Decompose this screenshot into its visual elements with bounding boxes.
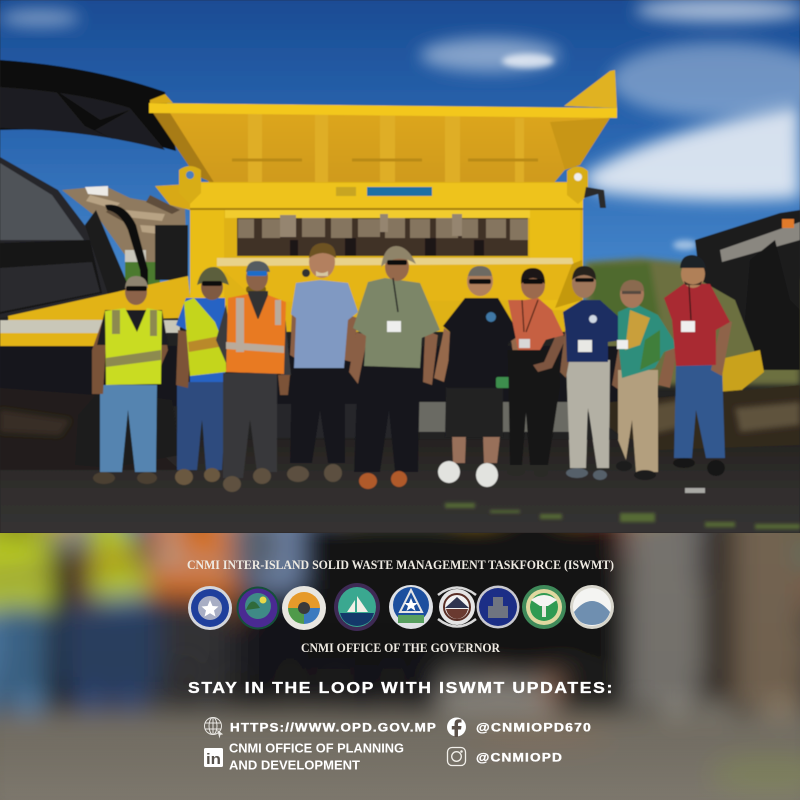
logo 4 — [334, 583, 380, 631]
person 2: green vest, blue shirt — [175, 267, 229, 485]
logo 7 — [476, 586, 520, 628]
contact links — [204, 718, 592, 772]
dark centre of blurred trousers — [300, 515, 625, 665]
blurred photo background band — [0, 533, 800, 800]
person 10: red polo, jeans — [664, 255, 732, 476]
ground — [0, 385, 800, 533]
black canopy arm — [0, 60, 176, 151]
person 7: coral top, black pants — [507, 268, 566, 477]
person 3: orange vest — [216, 261, 291, 492]
linkedin name: CNMI OFFICE OF PLANNING — [229, 742, 404, 756]
person 9: tropical shirt, khaki pants — [616, 280, 678, 480]
black machine cab — [0, 157, 148, 318]
subheading: office of the governor: CNMI OFFICE OF THE GOVERNOR — [301, 641, 501, 655]
yellow boom and base — [0, 276, 620, 406]
icon: globe — [204, 718, 222, 736]
hillside vegetation — [585, 258, 800, 385]
lower hopper panel — [217, 258, 582, 308]
pale shoes — [440, 680, 540, 712]
yellow shredder hopper lid — [149, 70, 617, 184]
debris pile — [62, 186, 187, 285]
logo 5 — [389, 585, 433, 629]
heading: taskforce name: CNMI INTER-ISLAND SOLID WASTE MANAGEMENT TASKFORCE (ISWMT) — [187, 558, 614, 572]
blurred grey trousers — [628, 515, 698, 705]
instagram handle: @CNMIOPD — [476, 750, 563, 764]
sky with clouds — [0, 0, 800, 300]
heading: stay in the loop: STAY IN THE LOOP WITH ISWMT UPDATES: — [188, 680, 614, 697]
facebook handle: @CNMIOPD670 — [476, 720, 592, 734]
logo 9 — [570, 585, 614, 629]
person 8: navy polo, khaki grey pants — [560, 266, 630, 480]
logo 8 — [522, 585, 566, 629]
icon: facebook — [447, 718, 466, 737]
icon: linkedin: in — [206, 751, 221, 768]
person 4: blue t-shirt — [287, 243, 358, 482]
dark engine block — [155, 225, 188, 280]
grey metal chassis panel — [415, 402, 580, 432]
linkedin name: AND DEVELOPMENT — [229, 758, 360, 772]
person 6: black polo, shorts — [434, 266, 528, 487]
person 5: olive polo, dark pants — [349, 246, 440, 489]
logo 6 — [438, 588, 476, 626]
website url: HTTPS://WWW.OPD.GOV.MP — [230, 720, 437, 734]
rotor drum with wooden debris — [237, 214, 528, 256]
agency logos row — [188, 583, 614, 631]
logo 3 — [282, 586, 326, 630]
icon: instagram — [448, 748, 466, 766]
logo 2 — [236, 586, 280, 630]
photo: team in front of yellow shredder — [0, 0, 800, 533]
ground fill for lower band — [0, 712, 800, 800]
yellow shredder body — [155, 166, 588, 332]
person 1: yellow vest, jeans — [92, 276, 168, 484]
icon: linkedin — [204, 748, 223, 768]
logo 1 — [188, 586, 232, 630]
black loader on the right — [695, 210, 800, 392]
camera arm — [584, 187, 606, 208]
